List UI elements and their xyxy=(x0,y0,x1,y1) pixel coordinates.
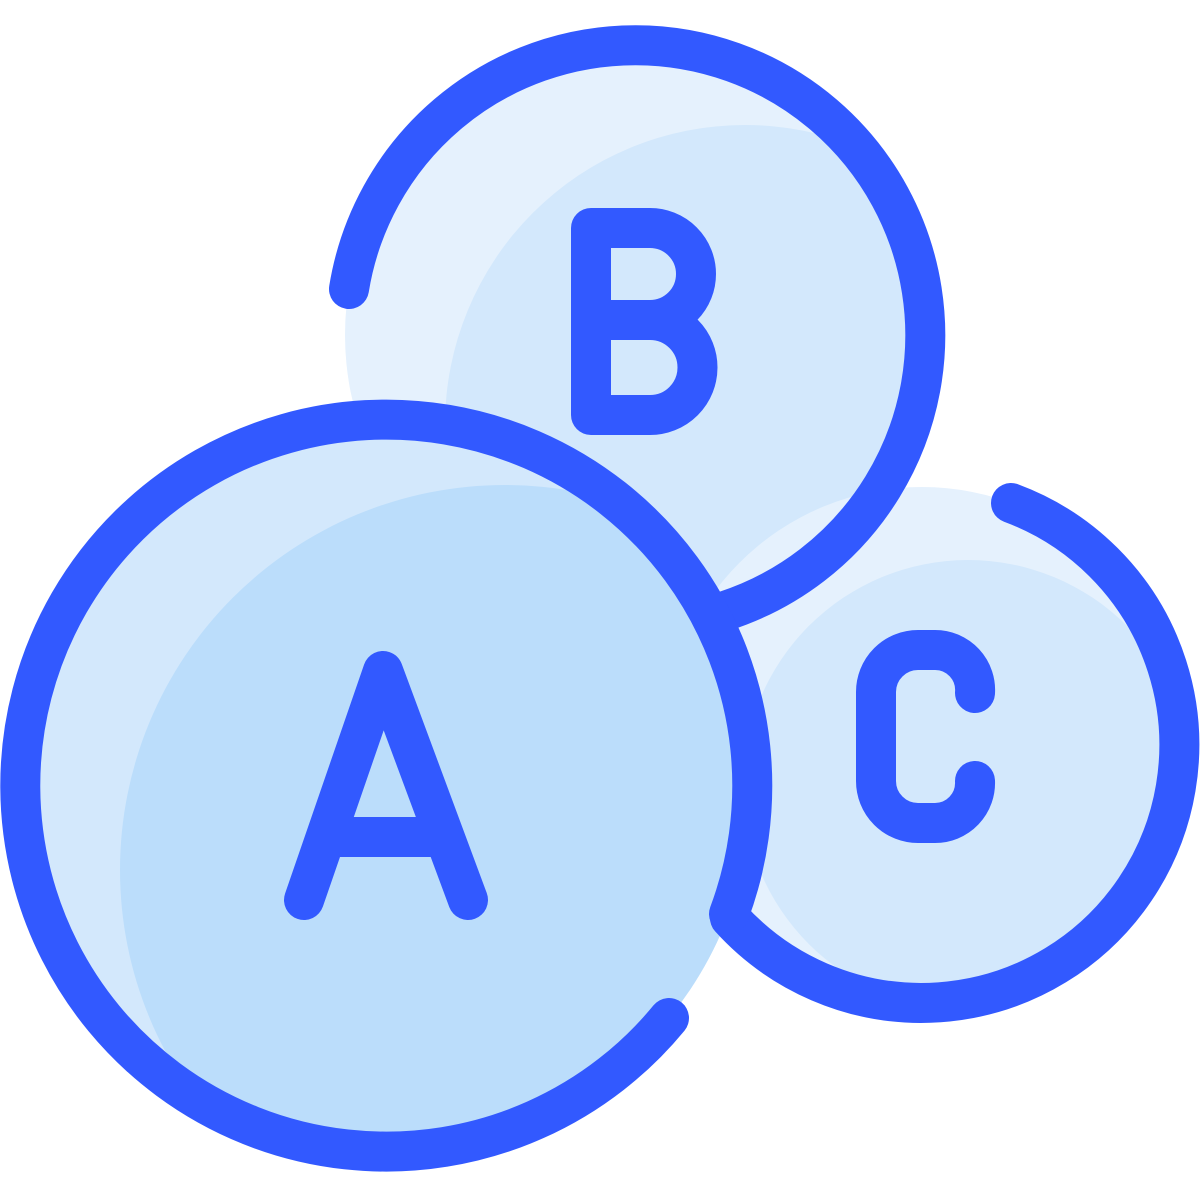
outline B xyxy=(349,45,925,611)
letter C xyxy=(876,650,975,823)
circle C fill xyxy=(718,487,1160,983)
outline A xyxy=(20,420,752,1152)
circle A fill xyxy=(40,440,732,1132)
letter A xyxy=(304,671,468,900)
letter B xyxy=(591,228,697,415)
circle B fill xyxy=(345,65,906,588)
outline C xyxy=(730,503,1179,1003)
